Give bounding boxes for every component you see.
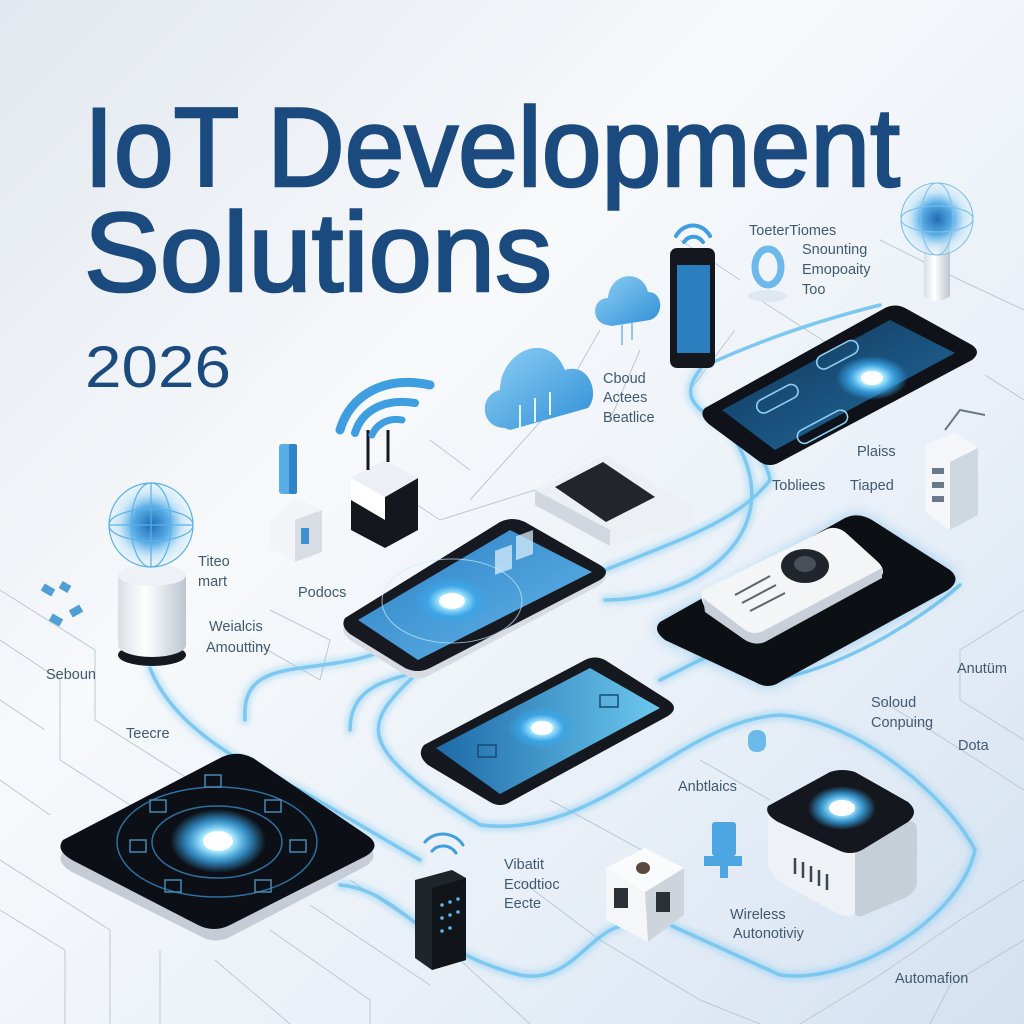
- icon: small house sensor: [270, 444, 322, 562]
- labels: Tobliees: [772, 478, 825, 494]
- labels: Actees: [603, 390, 647, 406]
- labels: Teecre: [126, 726, 170, 742]
- labels: Anbtlaics: [678, 779, 737, 795]
- device: top-right phone: [702, 306, 977, 465]
- labels: Snounting: [802, 242, 867, 258]
- labels: Eecte: [504, 896, 541, 912]
- device: wifi router: [340, 382, 430, 548]
- labels: Too: [802, 282, 825, 298]
- device: small wifi phone: [670, 226, 715, 368]
- device: small white cube: [606, 848, 684, 942]
- icon: small cloud: [595, 276, 660, 345]
- device: center square hub: [535, 455, 690, 546]
- labels: [46, 223, 1007, 987]
- labels: Podocs: [298, 585, 346, 601]
- labels: Soloud: [871, 695, 916, 711]
- icon: small chain links left: [41, 581, 83, 626]
- icon: large cloud: [485, 348, 593, 430]
- device: bottom router: [415, 834, 466, 970]
- device: bottom-right smart cube: [767, 770, 917, 916]
- labels: Weialcis: [209, 619, 263, 635]
- icon: blue plug: [704, 822, 742, 878]
- labels: Automafion: [895, 971, 968, 987]
- labels: Autonotiviy: [733, 926, 805, 942]
- device: left cylinder with globe: [109, 483, 193, 666]
- labels: Seboun: [46, 667, 96, 683]
- icon: ring sensor: [748, 249, 788, 302]
- cables: [150, 305, 975, 976]
- labels: Vibatit: [504, 857, 544, 873]
- circuit trace lines: [0, 240, 1024, 1024]
- labels: Tiaped: [850, 478, 894, 494]
- labels: Conpuing: [871, 715, 933, 731]
- title: [84, 85, 900, 400]
- labels: Ecodtioc: [504, 877, 560, 893]
- device: right server: [925, 410, 985, 530]
- title: Solutions: [84, 190, 552, 315]
- labels: Cboud: [603, 371, 646, 387]
- labels: ToeterTiomes: [749, 223, 836, 239]
- labels: Wireless: [730, 907, 786, 923]
- device: bottom-center phone: [421, 658, 674, 805]
- labels: Dota: [958, 738, 990, 754]
- title: IoT Development: [84, 85, 900, 210]
- title: 2026: [85, 335, 231, 400]
- device: bottom-left control pad: [60, 754, 375, 940]
- labels: Amouttiny: [206, 640, 271, 656]
- device: top-right globe on post: [901, 183, 973, 301]
- icon: blue lock: [748, 730, 766, 752]
- labels: Anutüm: [957, 661, 1007, 677]
- labels: Plaiss: [857, 444, 896, 460]
- labels: Beatlice: [603, 410, 655, 426]
- device: large central tablet: [343, 519, 606, 678]
- labels: Titeo: [198, 554, 230, 570]
- labels: mart: [198, 574, 227, 590]
- device: right black plate with white camera: [657, 515, 956, 686]
- labels: Emopoaity: [802, 262, 871, 278]
